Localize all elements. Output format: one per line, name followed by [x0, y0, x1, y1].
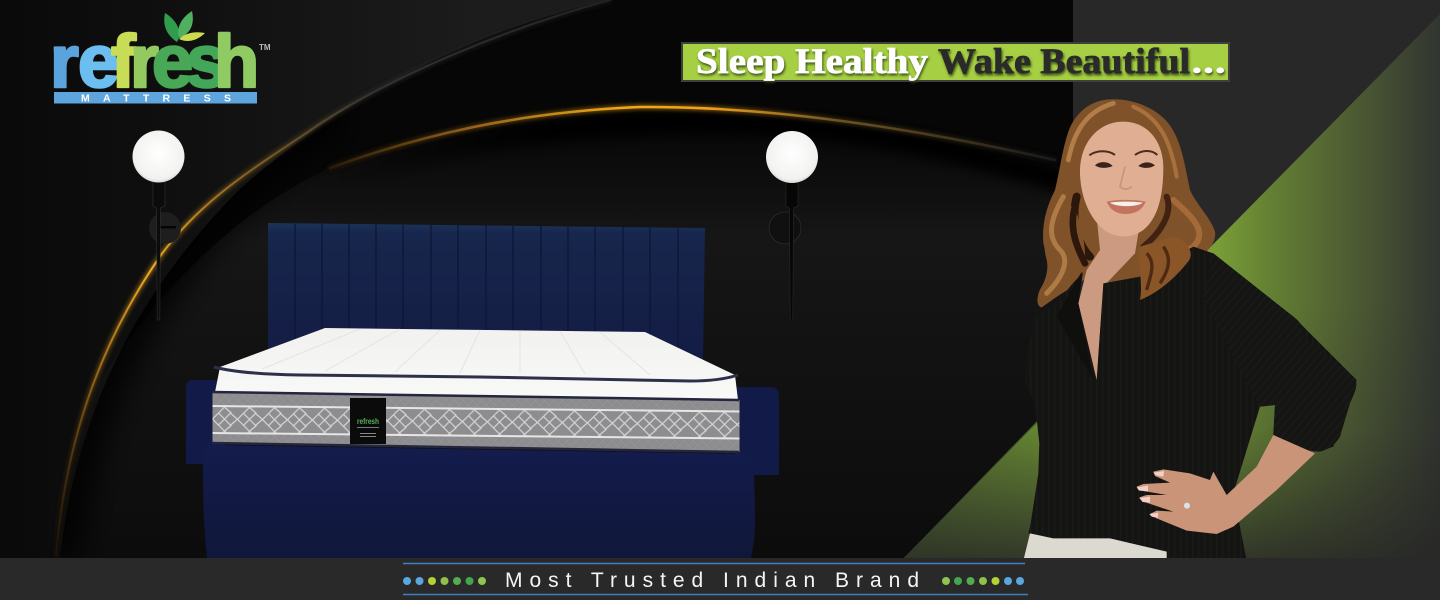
- piping: [214, 367, 738, 381]
- tagline ellipsis: ...: [1191, 41, 1226, 81]
- mattress side panel: [212, 392, 740, 452]
- golden arcs: [56, 0, 1055, 555]
- background: [123, 0, 1440, 352]
- tagline banner: [682, 41, 1229, 81]
- right dots: [942, 577, 1024, 585]
- tagline white: Sleep Healthy: [696, 41, 928, 81]
- trademark: TM: [259, 43, 271, 52]
- logo wordmark: r: [50, 20, 79, 103]
- mattress tag: refresh: [357, 417, 379, 426]
- logo wordmark: s: [186, 20, 227, 103]
- eyebrows: [1089, 151, 1157, 155]
- logo wordmark: h: [214, 20, 259, 103]
- bed base: [203, 445, 755, 558]
- shirt: [1025, 247, 1357, 561]
- logo wordmark: e: [78, 20, 119, 103]
- logo wordmark: e: [152, 20, 193, 103]
- logo subtitle: MATTRESS: [81, 92, 231, 104]
- logo wordmark: r: [130, 20, 159, 103]
- tagline dark: Wake Beautiful: [938, 41, 1190, 81]
- mattress: [212, 328, 740, 452]
- logo wordmark: f: [111, 20, 136, 103]
- footer text: Most Trusted Indian Brand: [505, 569, 919, 592]
- logo bar: [54, 92, 257, 104]
- collar: [1057, 272, 1093, 380]
- lower dark area: [112, 181, 1066, 490]
- green triangle: [902, 14, 1440, 560]
- nails: [1137, 471, 1164, 518]
- footer bar: [0, 558, 1440, 600]
- trousers: [1023, 533, 1167, 561]
- left curls over shoulder: [1037, 203, 1085, 307]
- left dots: [403, 577, 486, 585]
- right curls over shoulder: [1139, 237, 1191, 300]
- bed: [186, 223, 779, 558]
- hair: [1038, 99, 1215, 307]
- mouth: [1107, 200, 1146, 214]
- right wall lamp: [766, 131, 818, 320]
- dark sweep under outer arc: [244, 0, 1073, 220]
- left bed arm: [186, 380, 225, 464]
- face: [1080, 122, 1163, 236]
- outer arc glow: [56, 0, 610, 555]
- mattress pillow top: [215, 328, 738, 400]
- eyes: [1095, 162, 1155, 168]
- right bed arm: [735, 387, 779, 475]
- ring: [1184, 503, 1190, 509]
- inner arc: [330, 107, 1055, 168]
- outer arc: [56, 0, 610, 555]
- inner arc glow: [330, 107, 1055, 168]
- icon: leaves: [164, 11, 205, 42]
- logo: [50, 11, 271, 104]
- logo wordmark: [50, 20, 259, 103]
- mattress tag: [350, 398, 386, 444]
- headboard: [268, 223, 705, 360]
- nose: [1120, 167, 1132, 189]
- neck and chest: [1078, 217, 1140, 380]
- woman: [1023, 99, 1357, 561]
- footer lines: [403, 564, 1028, 594]
- left wall lamp: [132, 130, 184, 320]
- forearm and hand: [1137, 435, 1315, 534]
- sleeve: [1203, 253, 1356, 452]
